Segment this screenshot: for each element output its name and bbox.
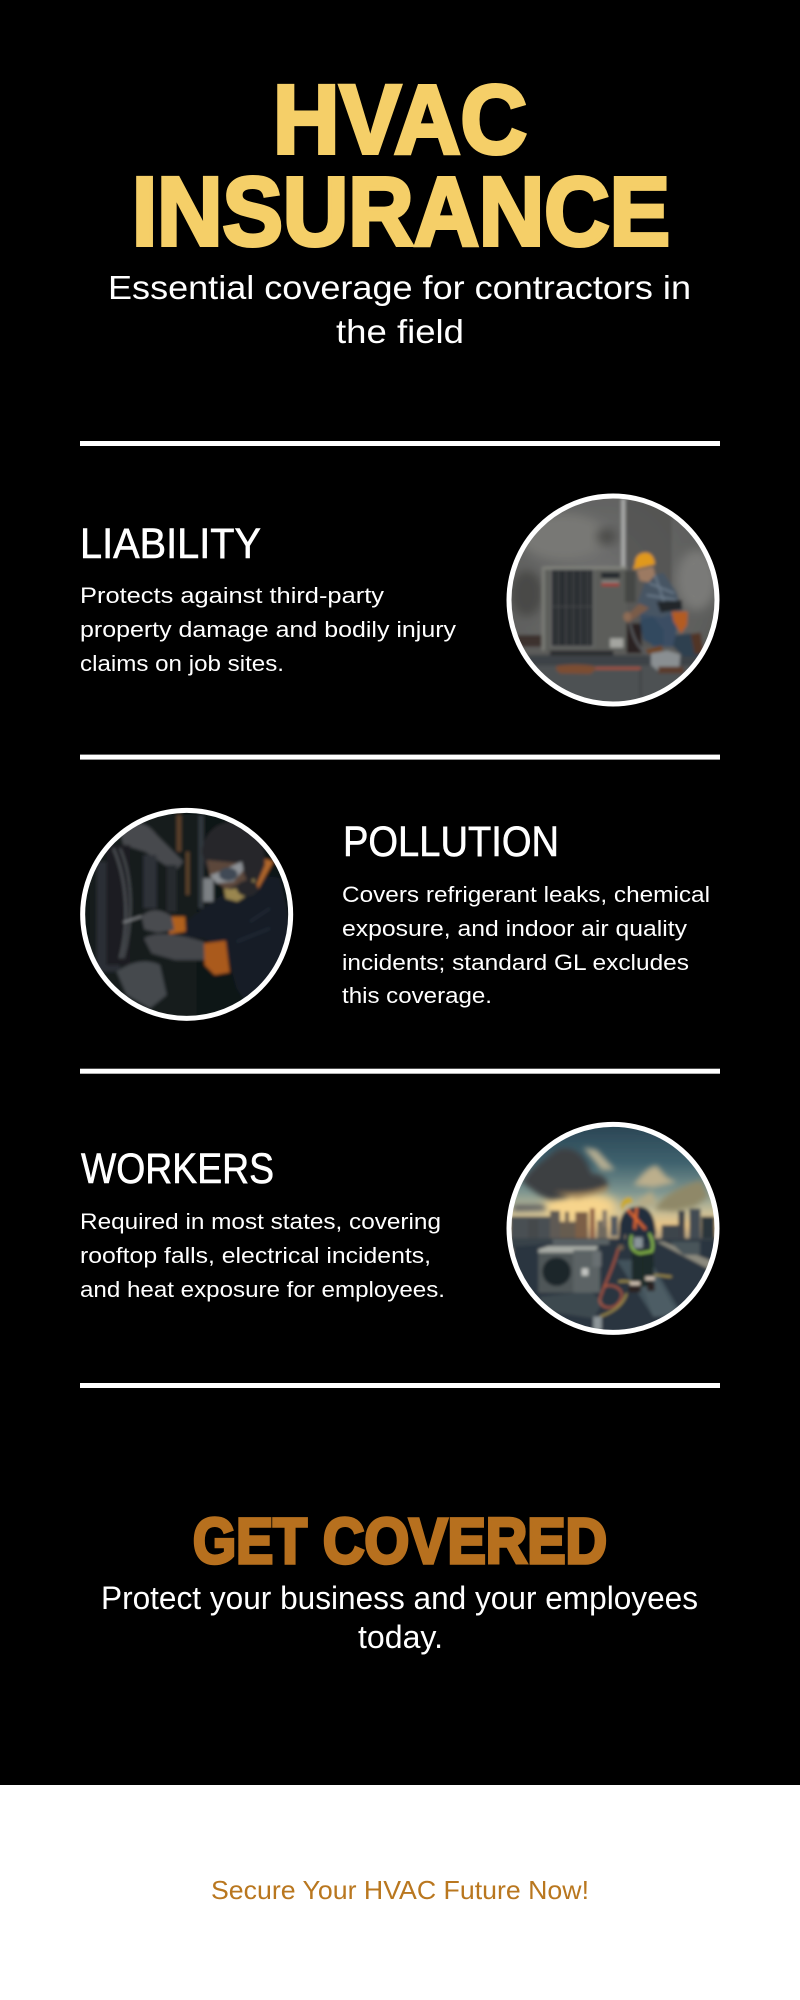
text block: call to action: Protect your business and your employees <box>101 1580 698 1616</box>
heading: pollution: POLLUTION <box>343 818 559 866</box>
text block: pollution description: incidents; standard GL excludes <box>342 950 689 975</box>
subtitle <box>108 269 691 350</box>
text block: liability description: Protects against third-party <box>80 583 384 608</box>
text block: pollution description <box>342 882 710 1008</box>
heading: get covered: COVERED <box>323 1505 607 1577</box>
text block: liability description: property damage and bodily injury <box>80 617 456 642</box>
subtitle: Essential coverage for contractors in <box>108 269 691 306</box>
panel: workers <box>80 1122 720 1335</box>
panel: pollution <box>80 808 708 1021</box>
title <box>132 65 670 266</box>
text block: liability description: claims on job sites. <box>80 651 284 676</box>
photo: technician in goggles and gloves at equipment <box>80 808 294 1021</box>
text block: call to action: today. <box>358 1619 443 1655</box>
text block: pollution description: this coverage. <box>342 983 492 1008</box>
title: INSURANCE <box>132 157 670 266</box>
text block: pollution description: Covers refrigerant leaks, chemical <box>342 882 710 907</box>
heading: get covered <box>193 1505 607 1577</box>
text block: workers description <box>80 1209 445 1302</box>
panel: footer <box>0 1785 800 2000</box>
footer call to action: Secure Your HVAC Future Now! <box>211 1875 589 1905</box>
text block: pollution description: exposure, and indoor air quality <box>342 916 687 941</box>
photo: roofer technician at sunset over skyline <box>506 1122 720 1335</box>
subtitle: the field <box>336 313 464 350</box>
text block: liability description <box>80 583 456 676</box>
text block: workers description: rooftop falls, electrical incidents, <box>80 1243 431 1268</box>
heading: liability: LIABILITY <box>80 520 261 568</box>
text block: workers description: Required in most states, covering <box>80 1209 441 1234</box>
title: HVAC <box>273 65 527 174</box>
panel: liability <box>81 494 720 706</box>
heading: get covered: GET <box>193 1505 307 1577</box>
text block: call to action <box>101 1580 698 1655</box>
photo: technician at outdoor AC unit <box>506 494 720 706</box>
heading: workers: WORKERS <box>81 1145 274 1193</box>
text block: workers description: and heat exposure for employees. <box>80 1277 445 1302</box>
